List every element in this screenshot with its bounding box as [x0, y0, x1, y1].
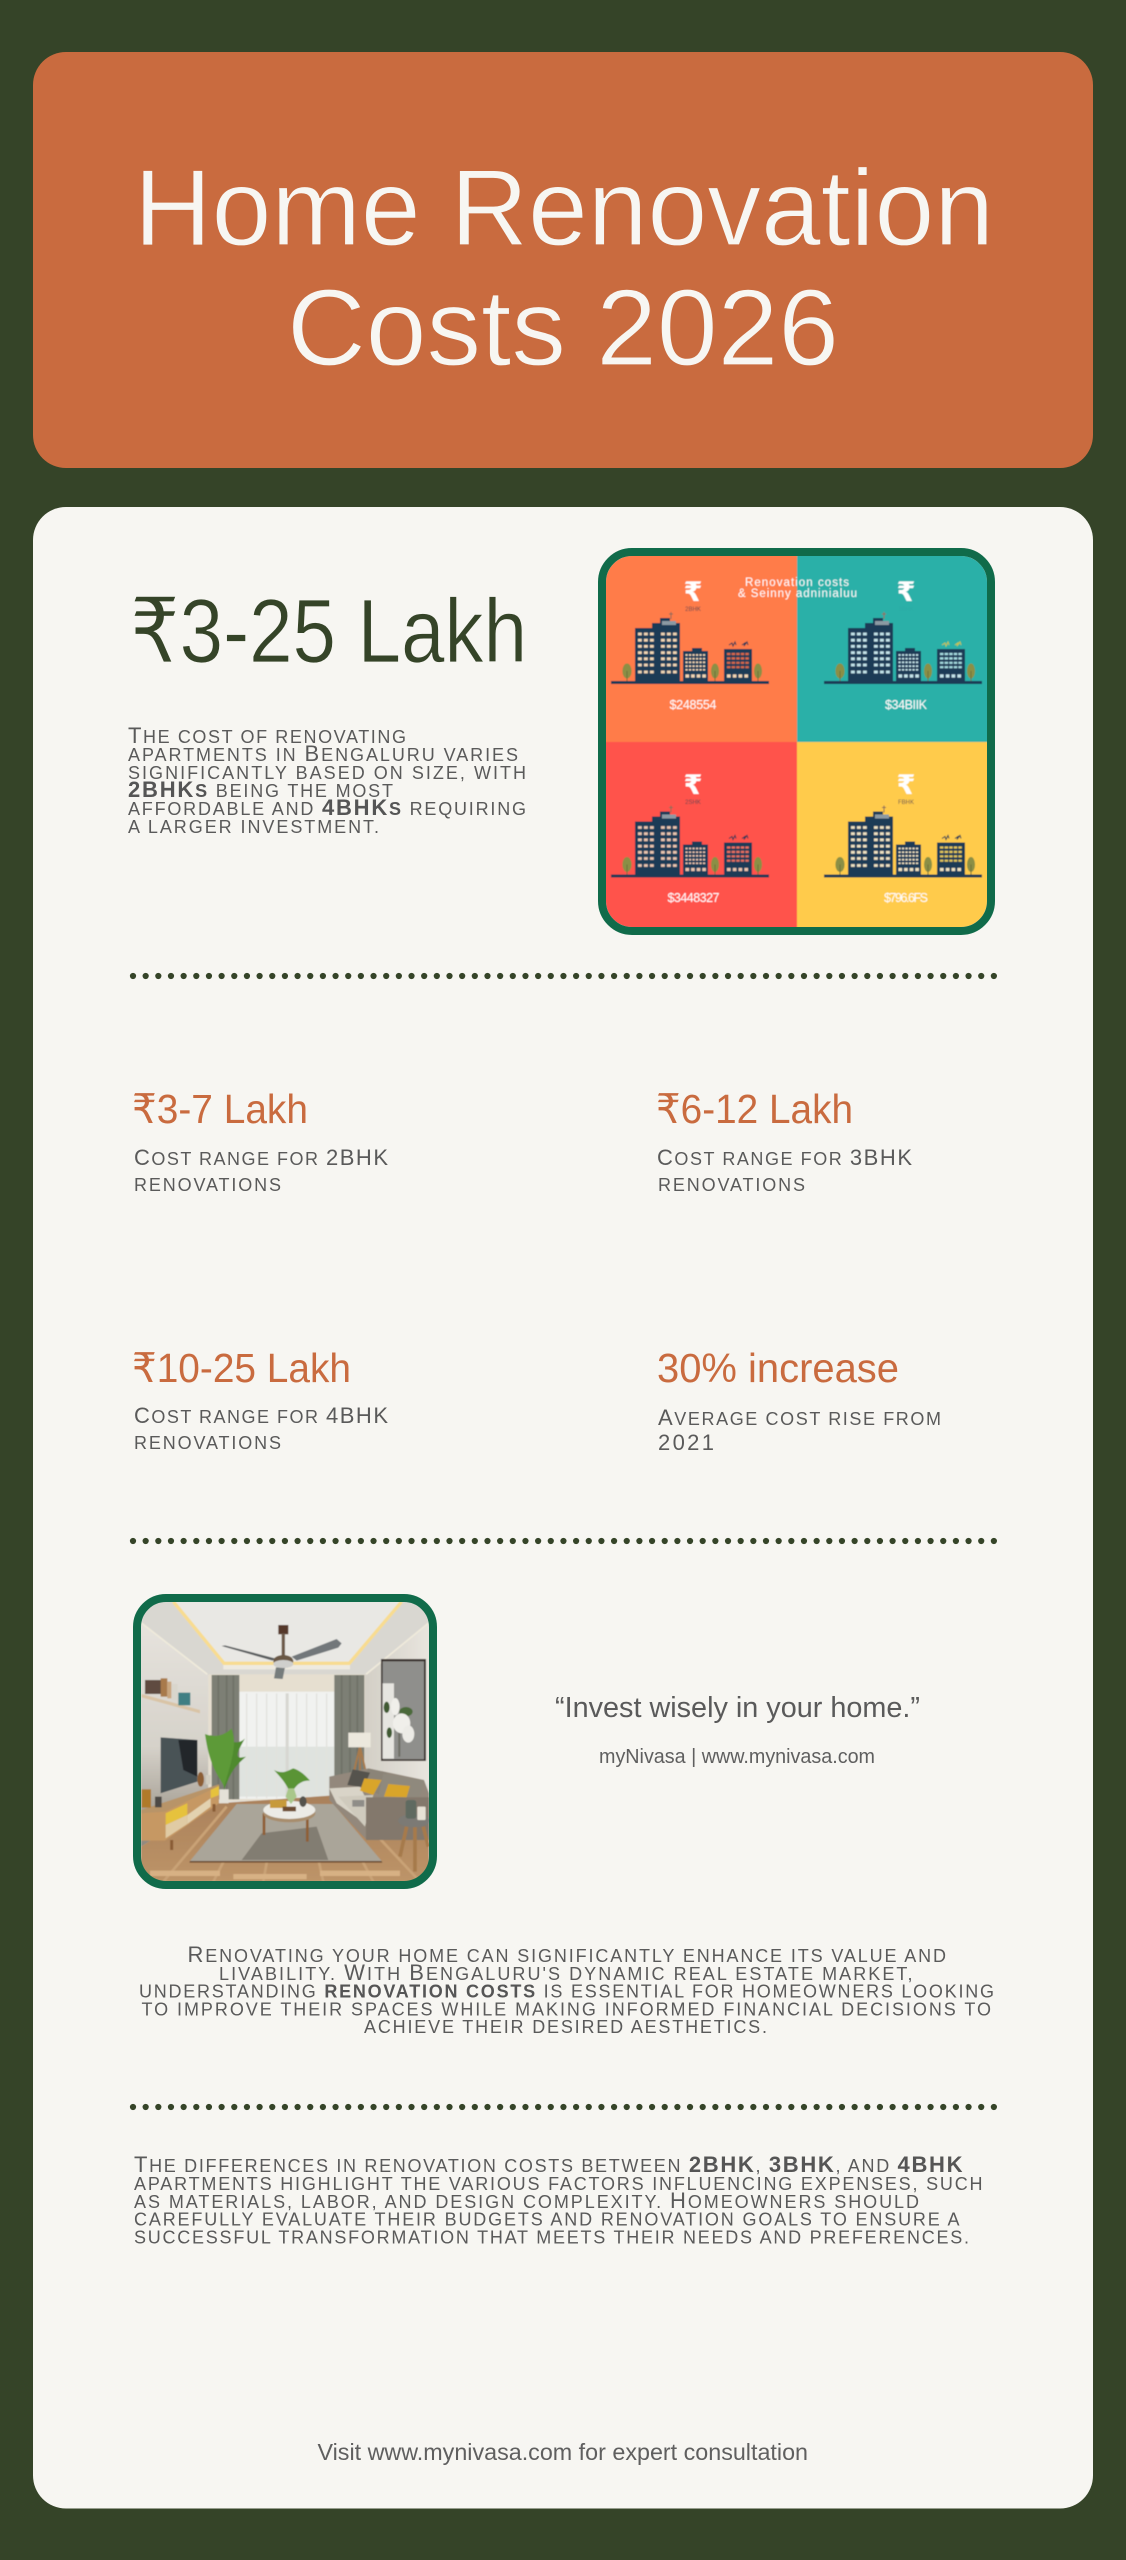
room illustration	[140, 1600, 430, 1883]
wall art	[381, 1659, 426, 1761]
tv unit	[141, 1784, 219, 1841]
renovation summary paragraph: ACHIEVE THEIR DESIRED AESTHETICS.	[364, 2017, 767, 2037]
title	[134, 147, 994, 389]
stat: increase: AVERAGE COST RISE FROM	[658, 1405, 941, 1430]
main content panel	[33, 507, 1093, 2508]
stat: 2BHK: ₹3-7 Lakh	[132, 1086, 308, 1132]
image frame	[602, 552, 991, 931]
image tiles and skylines	[600, 550, 992, 932]
intro paragraph: 2BHKS BEING THE MOST	[128, 777, 393, 802]
intro paragraph: AFFORDABLE AND 4BHKS REQUIRING	[128, 795, 526, 820]
header background	[33, 52, 1093, 468]
stat: 3BHK	[656, 1086, 912, 1195]
image tiles and skylines: $796.6FS	[884, 891, 928, 905]
footer call to action: Visit www.mynivasa.com for expert consultation	[318, 2439, 808, 2465]
stat: 2BHK	[132, 1086, 388, 1195]
stat: increase	[657, 1345, 941, 1455]
image tiles and skylines: Renovation costs	[745, 577, 849, 589]
differences paragraph: SUCCESSFUL TRANSFORMATION THAT MEETS THEIR NEEDS AND PREFERENCES.	[134, 2228, 969, 2248]
stat: increase: 2021	[658, 1430, 714, 1455]
image tiles and skylines: $34BIIK	[885, 698, 928, 712]
stat: 3BHK: ₹6-12 Lakh	[656, 1086, 853, 1132]
photo frame	[137, 1598, 433, 1885]
ceiling glow	[173, 1602, 402, 1663]
intro paragraph: A LARGER INVESTMENT.	[128, 817, 379, 837]
panel background	[33, 507, 1093, 2508]
renovation summary paragraph: RENOVATING YOUR HOME CAN SIGNIFICANTLY ENHANCE ITS VALUE AND	[188, 1942, 946, 1967]
image tiles and skylines: $3448327	[668, 891, 720, 905]
stat: 2BHK: RENOVATIONS	[134, 1175, 281, 1195]
differences paragraph: AS MATERIALS, LABOR, AND DESIGN COMPLEXITY. HOMEOWNERS SHOULD	[134, 2188, 919, 2213]
quote	[555, 1692, 920, 1768]
floor plant	[219, 1789, 229, 1803]
header banner	[33, 52, 1093, 468]
divider 2	[133, 1538, 996, 1544]
curtain lamp	[354, 1747, 365, 1770]
stat: 2BHK: COST RANGE FOR 2BHK	[134, 1145, 388, 1170]
divider 3	[133, 2104, 996, 2110]
intro paragraph: SIGNIFICANTLY BASED ON SIZE, WITH	[128, 763, 526, 783]
coffee table	[264, 1813, 307, 1842]
tv	[161, 1737, 197, 1793]
image tiles and skylines: ₹	[897, 770, 915, 800]
image tiles and skylines: ₹	[684, 577, 702, 607]
image tiles and skylines: ₹	[897, 577, 915, 607]
image tiles and skylines: 3BHK	[898, 607, 914, 613]
title: Home Renovation	[134, 147, 994, 269]
image tiles and skylines: 2SHK	[685, 800, 701, 806]
stat: increase: 30% increase	[657, 1345, 899, 1391]
stat: 4BHK	[132, 1345, 388, 1453]
attribution: myNivasa | www.mynivasa.com	[599, 1746, 875, 1768]
renovation summary paragraph: LIVABILITY. WITH BENGALURU'S DYNAMIC REAL ESTATE MARKET,	[219, 1960, 912, 1985]
differences paragraph: THE DIFFERENCES IN RENOVATION COSTS BETWEEN 2BHK, 3BHK, AND 4BHK	[134, 2152, 963, 2177]
divider 1	[133, 973, 996, 979]
image: renovation cost city illustration	[600, 550, 992, 932]
stat: 4BHK: RENOVATIONS	[134, 1433, 281, 1453]
image tiles and skylines: ₹	[684, 770, 702, 800]
side table	[400, 1827, 428, 1872]
headline stat: ₹3-25 Lakh	[130, 582, 527, 682]
ceiling fan	[278, 1625, 288, 1634]
differences paragraph: APARTMENTS HIGHLIGHT THE VARIOUS FACTORS INFLUENCING EXPENSES, SUCH	[134, 2174, 982, 2194]
intro paragraph	[128, 723, 526, 837]
image: living room photo	[137, 1598, 433, 1885]
image tiles and skylines: FBHK	[898, 800, 914, 806]
stat: 3BHK: RENOVATIONS	[658, 1175, 805, 1195]
stat: 3BHK: COST RANGE FOR 3BHK	[657, 1145, 912, 1170]
renovation summary paragraph	[139, 1942, 994, 2037]
sofa	[329, 1768, 429, 1840]
shelf and books	[142, 1694, 200, 1713]
image tiles and skylines: $248554	[670, 698, 717, 712]
title: Costs 2026	[287, 267, 839, 389]
image tiles and skylines: & Seinny adninialuu	[738, 588, 857, 600]
differences paragraph	[134, 2152, 982, 2248]
quote: “Invest wisely in your home.”	[555, 1692, 920, 1724]
differences paragraph: CAREFULLY EVALUATE THEIR BUDGETS AND RENOVATION GOALS TO ENSURE A	[134, 2210, 960, 2230]
renovation summary paragraph: TO IMPROVE THEIR SPACES WHILE MAKING INFORMED FINANCIAL DECISIONS TO	[142, 2000, 991, 2020]
intro paragraph: THE COST OF RENOVATING	[128, 723, 406, 748]
stat: 4BHK: ₹10-25 Lakh	[132, 1345, 351, 1391]
intro paragraph: APARTMENTS IN BENGALURU VARIES	[128, 741, 518, 766]
renovation summary paragraph: UNDERSTANDING RENOVATION COSTS IS ESSENTIAL FOR HOMEOWNERS LOOKING	[139, 1982, 994, 2002]
image tiles and skylines: 2BHK	[685, 607, 701, 613]
stat: 4BHK: COST RANGE FOR 4BHK	[134, 1403, 388, 1428]
